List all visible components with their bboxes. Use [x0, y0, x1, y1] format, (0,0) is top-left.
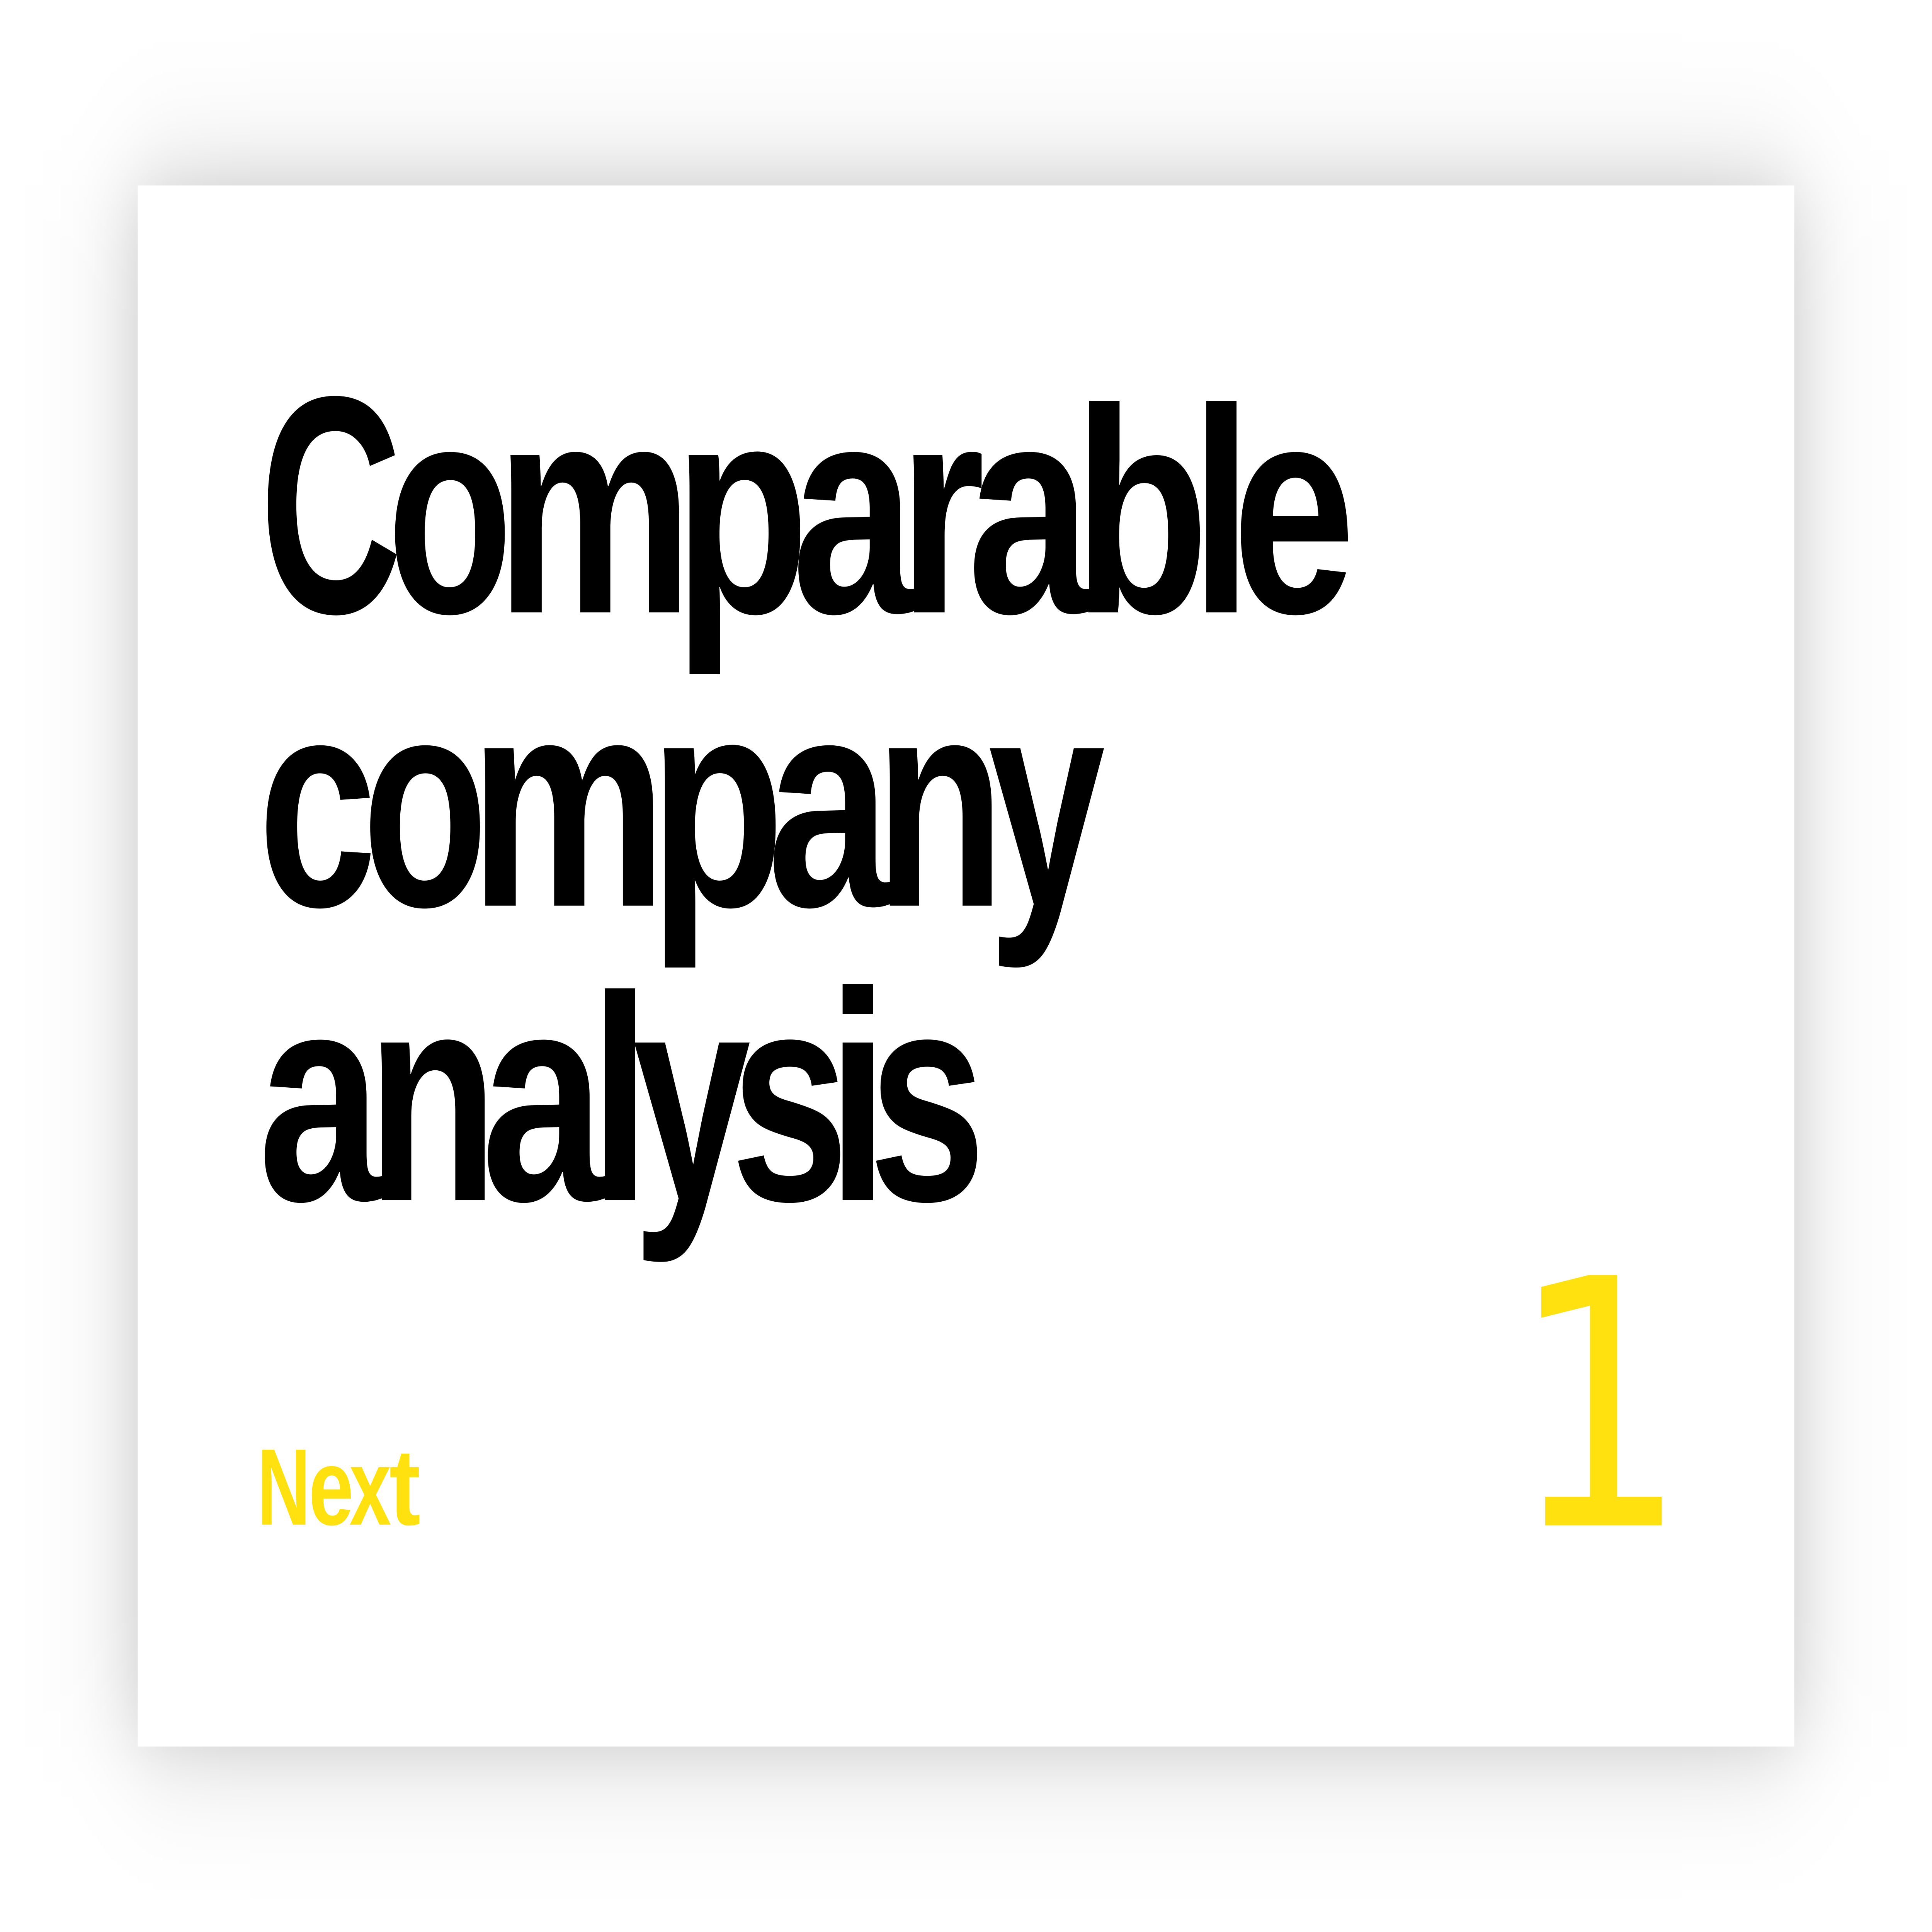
next label: e [309, 1426, 354, 1548]
title: r [899, 343, 985, 676]
title: c [258, 636, 377, 969]
panel: white title card [138, 185, 1794, 1747]
next label: x [349, 1426, 391, 1548]
title: s [869, 930, 986, 1264]
title: a [968, 343, 1091, 676]
title: b [1074, 348, 1209, 674]
title: p [650, 636, 785, 969]
title: e [1232, 343, 1355, 676]
title: n [875, 636, 1005, 969]
page number: 1 [1511, 1207, 1687, 1607]
title: s [731, 930, 849, 1264]
title: a [481, 930, 604, 1264]
title: a [792, 343, 915, 676]
card drop shadow [94, 125, 1838, 1807]
title: l [1190, 348, 1252, 674]
title: m [496, 343, 693, 676]
next label: t [389, 1426, 420, 1548]
title: C [260, 332, 402, 678]
title: o [387, 343, 513, 676]
title: a [259, 930, 381, 1264]
next label: N [257, 1426, 310, 1548]
next label [246, 1426, 437, 1548]
title: y [988, 636, 1105, 969]
title: p [674, 343, 809, 676]
title: l [589, 936, 651, 1262]
title: m [470, 636, 667, 969]
title: o [362, 636, 488, 969]
title: y [633, 930, 751, 1264]
title: i [827, 930, 889, 1264]
title [246, 331, 1367, 1251]
title: n [367, 930, 498, 1264]
title: a [767, 636, 890, 969]
